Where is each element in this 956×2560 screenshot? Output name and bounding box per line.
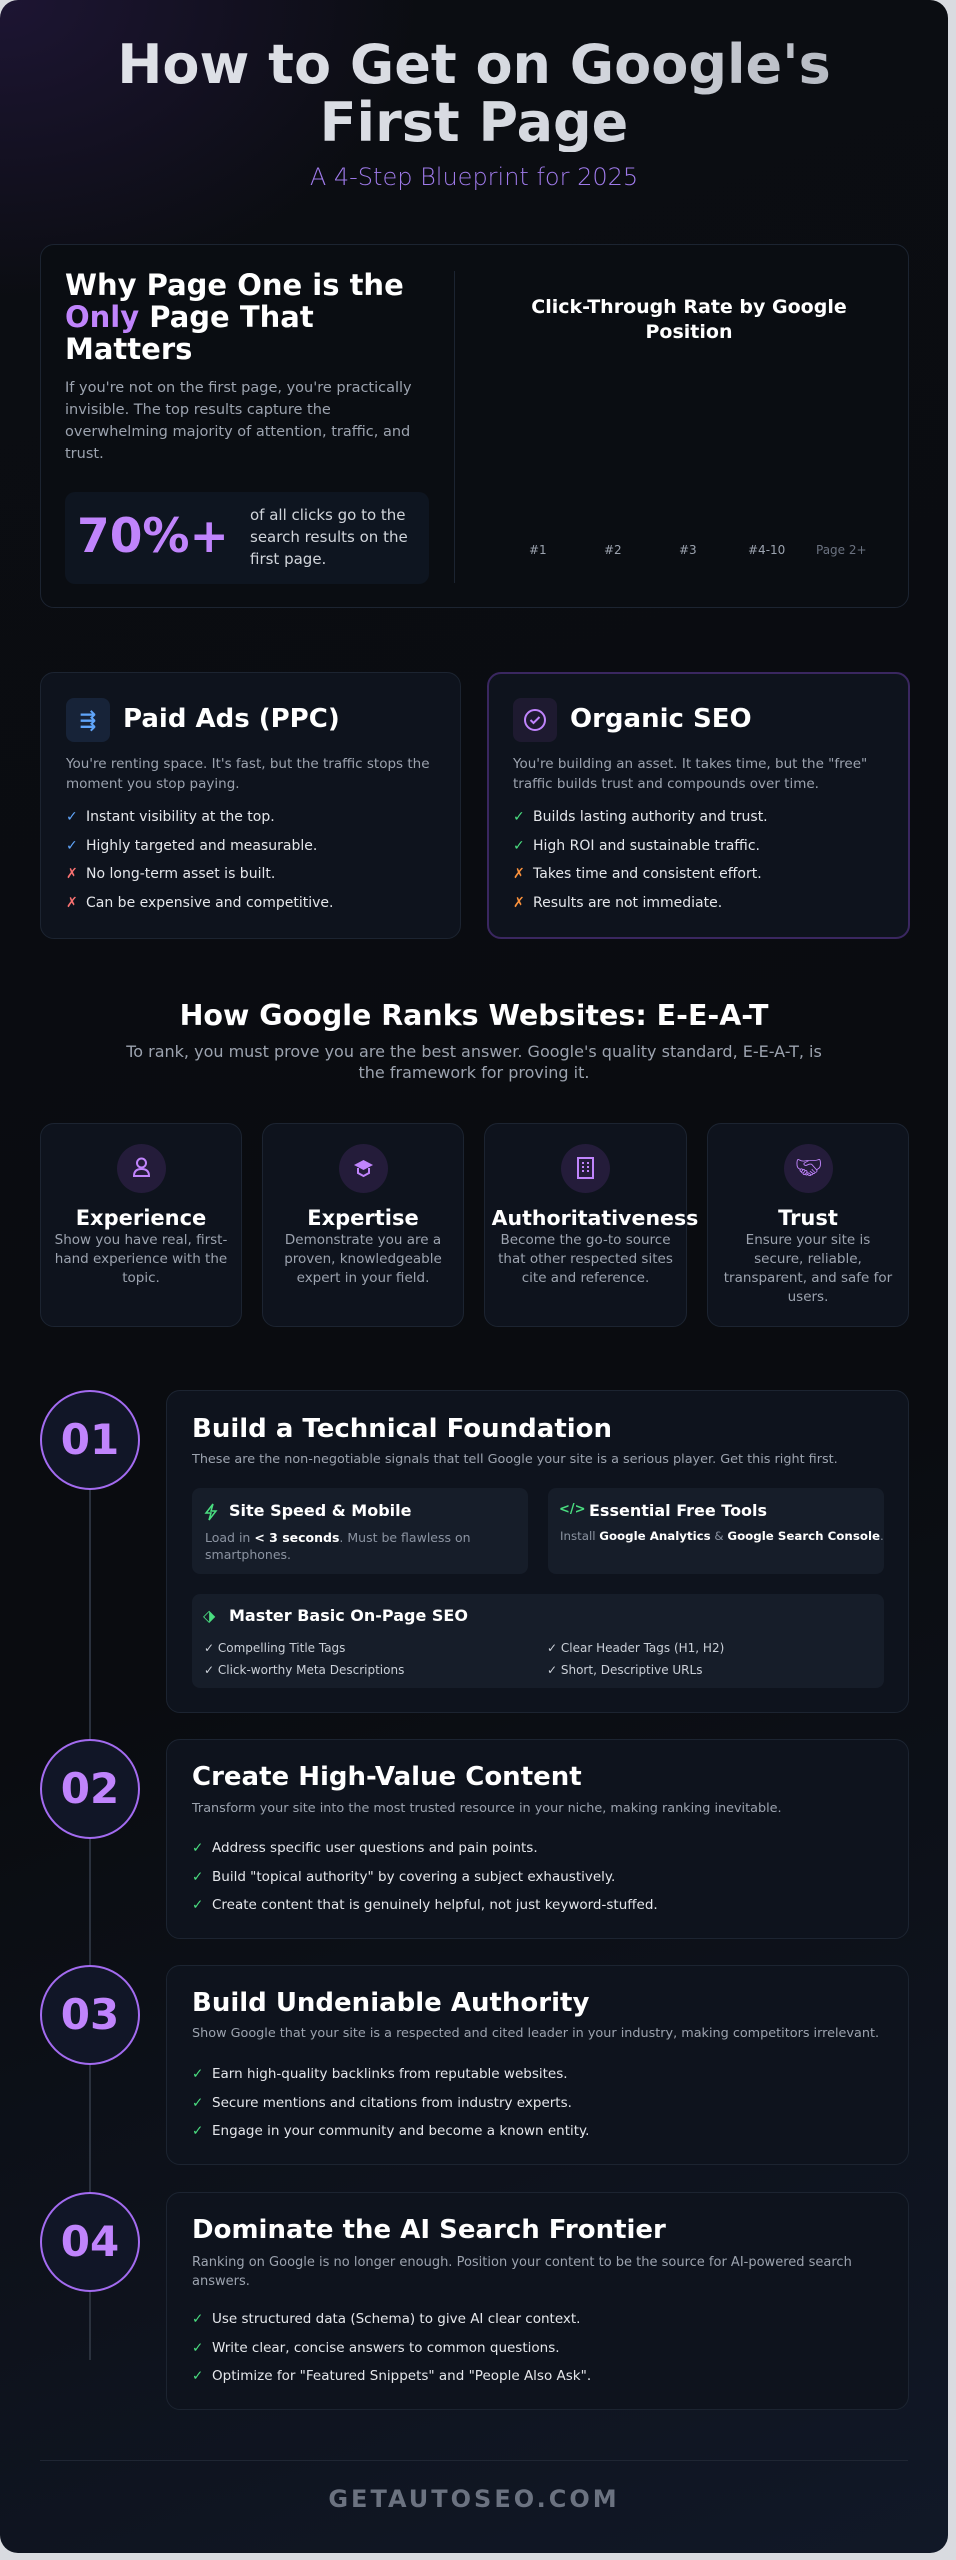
box: site speed: Site Speed & Mobile — [229, 1501, 412, 1520]
box: on-page seo: ✓ Clear Header Tags (H1, H2) — [547, 1641, 724, 1655]
list: step 2: Address specific user questions and pain points. — [212, 1840, 538, 1856]
text: E-E-A-T intro: the framework for proving it. — [359, 1063, 589, 1082]
list: step 4: Write clear, concise answers to common questions. — [212, 2340, 560, 2356]
heading: paid ads: Paid Ads (PPC) — [123, 704, 340, 734]
text: authoritativeness: that other respected sites — [498, 1251, 673, 1267]
stat number: 70%+ — [77, 509, 229, 564]
box: site speed: smartphones. — [205, 1547, 291, 1562]
text: step 4 description — [192, 2255, 852, 2289]
title — [0, 36, 948, 152]
text: expertise: Demonstrate you are a — [285, 1232, 441, 1248]
list: step 3: ✓ — [192, 2094, 203, 2110]
list: organic pros/cons: ✗ — [513, 894, 525, 910]
list: organic pros/cons: Results are not immediate. — [533, 894, 722, 910]
list: step 4: ✓ — [192, 2311, 203, 2327]
text: step 1 description: These are the non-negotiable signals that tell Google your site is a serious player. Get this right first. — [192, 1452, 838, 1467]
list: paid ads pros/cons: ✗ — [66, 894, 78, 910]
box: on-page seo — [192, 1594, 884, 1688]
step 01 badge — [40, 1390, 140, 1490]
list: paid ads pros/cons: Highly targeted and measurable. — [86, 838, 317, 854]
text: trust — [724, 1232, 892, 1305]
text: trust: transparent, and safe for — [724, 1270, 892, 1286]
heading: why page one — [65, 268, 404, 366]
heading: E-E-A-T: How Google Ranks Websites: E-E-A-T — [180, 999, 768, 1032]
list: step 4: Use structured data (Schema) to give AI clear context. — [212, 2311, 580, 2327]
text: intro paragraph: trust. — [65, 446, 104, 462]
box: free tools: Essential Free Tools — [589, 1501, 767, 1520]
panel: step 4 AI search — [166, 2192, 909, 2410]
box: on-page seo: ✓ Click-worthy Meta Descriptions — [204, 1663, 404, 1677]
text: paid ads description — [66, 756, 430, 792]
text: authoritativeness: Become the go-to source — [500, 1232, 671, 1248]
box: free tools — [548, 1488, 884, 1574]
text: authoritativeness: cite and reference. — [522, 1270, 649, 1286]
list: step 3: Engage in your community and become a known entity. — [212, 2123, 589, 2139]
box: site speed: Load in < 3 seconds. Must be flawless on — [205, 1530, 471, 1545]
chart axis labels — [529, 543, 867, 557]
chart axis labels: #1 — [529, 543, 547, 557]
list: step 2: ✓ — [192, 1840, 203, 1856]
text: paid ads description: You're renting space. It's fast, but the traffic stops the — [66, 756, 430, 772]
panel: step 2 content — [166, 1739, 909, 1939]
icon: graduation cap — [339, 1144, 388, 1193]
card: experience — [40, 1123, 242, 1327]
icon: handshake: 🤝︎ — [795, 1156, 822, 1181]
text: experience: Show you have real, first- — [55, 1232, 227, 1248]
subtitle: A 4-Step Blueprint for 2025 — [310, 163, 638, 191]
text: E-E-A-T intro — [126, 1042, 822, 1082]
text: intro paragraph: invisible. The top results capture the — [65, 402, 331, 418]
icon: code: </> — [559, 1502, 586, 1517]
list: organic pros/cons: ✗ — [513, 866, 525, 882]
icon: person — [117, 1144, 166, 1193]
box: on-page seo: ✓ Compelling Title Tags — [204, 1641, 345, 1655]
footer: brand: GETAUTOSEO.COM — [328, 2485, 620, 2513]
text: intro paragraph — [65, 380, 412, 462]
chart title — [531, 296, 847, 343]
text: expertise — [284, 1232, 442, 1286]
step 02 badge — [40, 1739, 140, 1839]
step 01 badge: 01 — [61, 1415, 119, 1464]
list: paid ads pros/cons: ✓ — [66, 838, 78, 854]
panel: step 1 technical foundation — [166, 1390, 909, 1713]
title: First Page — [320, 91, 628, 154]
list: paid ads pros/cons: No long-term asset is built. — [86, 866, 275, 882]
stat box: 70%+ — [65, 492, 429, 584]
box: on-page seo: ✓ Short, Descriptive URLs — [547, 1663, 702, 1677]
icon: bolt — [204, 1504, 218, 1520]
text: trust: Ensure your site is — [746, 1232, 870, 1248]
list: step 4: Optimize for "Featured Snippets" and "People Also Ask". — [212, 2368, 591, 2384]
stat text: first page. — [250, 550, 326, 568]
stat text: of all clicks go to the — [250, 506, 406, 524]
panel: why page one — [40, 244, 909, 608]
card: expertise — [262, 1123, 464, 1327]
text: trust: users. — [788, 1289, 828, 1305]
list: step 3: ✓ — [192, 2066, 203, 2082]
list: step 3: ✓ — [192, 2123, 203, 2139]
chart: CTR by position — [529, 296, 867, 557]
panel: organic seo — [487, 672, 910, 939]
text: expertise: proven, knowledgeable — [284, 1251, 442, 1267]
text: step 4 description: answers. — [192, 2274, 250, 2289]
box: site speed — [192, 1488, 528, 1574]
heading: step 2: Create High-Value Content — [192, 1762, 582, 1792]
box: on-page seo: Master Basic On-Page SEO — [229, 1606, 468, 1625]
card: authoritativeness — [484, 1123, 687, 1327]
icon: paid ads: ⇶ — [80, 708, 96, 732]
list: step 4 — [192, 2311, 591, 2384]
chart axis labels: Page 2+ — [816, 543, 867, 557]
text: trust: secure, reliable, — [754, 1251, 862, 1267]
step 03 badge — [40, 1965, 140, 2065]
card: trust — [707, 1123, 909, 1327]
icon: paid ads — [66, 698, 110, 742]
text: organic description: You're building an asset. It takes time, but the "free" — [513, 756, 867, 772]
panel: step 3 authority — [166, 1965, 909, 2165]
chart title: Click-Through Rate by Google — [531, 296, 847, 318]
text: expertise: expert in your field. — [297, 1270, 429, 1286]
text: authoritativeness — [498, 1232, 673, 1286]
heading: why page one: Why Page One is the — [65, 268, 404, 302]
list: organic pros/cons: High ROI and sustainable traffic. — [533, 838, 760, 854]
icon: tag: ⬗ — [203, 1606, 215, 1625]
text: experience: hand experience with the — [55, 1251, 227, 1267]
title: experience: Experience — [76, 1206, 206, 1230]
list: paid ads pros/cons — [66, 809, 333, 910]
step 04 badge — [40, 2192, 140, 2292]
text: experience: topic. — [122, 1270, 160, 1286]
stat text — [250, 506, 408, 568]
box: free tools: Install Google Analytics & Google Search Console. — [560, 1529, 884, 1543]
heading: why page one: Matters — [65, 332, 192, 366]
text: organic description — [513, 756, 867, 792]
panel: paid ads — [40, 672, 461, 939]
heading: step 3: Build Undeniable Authority — [192, 1988, 589, 2018]
list: step 2: Build "topical authority" by covering a subject exhaustively. — [212, 1868, 615, 1884]
step 03 badge: 03 — [61, 1990, 119, 2039]
text: step 2 description: Transform your site into the most trusted resource in your niche, making ranking inevitable. — [192, 1801, 782, 1816]
title: expertise: Expertise — [307, 1206, 419, 1230]
text: experience — [55, 1232, 227, 1286]
title: authoritativeness: Authoritativeness — [492, 1206, 698, 1230]
chart axis labels: #4-10 — [748, 543, 785, 557]
list: step 4: ✓ — [192, 2368, 203, 2384]
icon: organic seo — [513, 698, 557, 742]
list: step 2 — [192, 1840, 658, 1913]
text: step 3 description: Show Google that your site is a respected and cited leader in your industry, making competitors irrelevant. — [192, 2026, 879, 2041]
text: paid ads description: moment you stop paying. — [66, 776, 240, 792]
list: step 3 — [192, 2066, 589, 2139]
list: organic pros/cons: Builds lasting authority and trust. — [533, 809, 768, 825]
title: trust: Trust — [778, 1206, 838, 1230]
heading: organic seo: Organic SEO — [570, 704, 752, 734]
list: organic pros/cons: ✓ — [513, 809, 525, 825]
list: step 2: ✓ — [192, 1897, 203, 1913]
text: E-E-A-T intro: To rank, you must prove you are the best answer. Google's quality standard, E-E-A-T, is — [126, 1042, 822, 1061]
chart axis labels: #3 — [679, 543, 697, 557]
list: paid ads pros/cons: Instant visibility at the top. — [86, 809, 275, 825]
text: organic description: traffic builds trust and compounds over time. — [513, 776, 819, 792]
icon: handshake — [784, 1144, 833, 1193]
step 02 badge: 02 — [61, 1764, 119, 1813]
list: step 4: ✓ — [192, 2340, 203, 2356]
text: intro paragraph: If you're not on the first page, you're practically — [65, 380, 412, 396]
list: organic pros/cons — [513, 809, 768, 910]
heading: step 4: Dominate the AI Search Frontier — [192, 2215, 666, 2245]
step 04 badge: 04 — [61, 2217, 119, 2266]
text: intro paragraph: overwhelming majority of attention, traffic, and — [65, 424, 410, 440]
list: step 2: Create content that is genuinely helpful, not just keyword-stuffed. — [212, 1897, 658, 1913]
chart axis labels: #2 — [604, 543, 622, 557]
list: paid ads pros/cons: ✓ — [66, 809, 78, 825]
list: organic pros/cons: ✓ — [513, 838, 525, 854]
stat text: search results on the — [250, 528, 408, 546]
list: step 2: ✓ — [192, 1868, 203, 1884]
list: paid ads pros/cons: Can be expensive and competitive. — [86, 894, 333, 910]
list: paid ads pros/cons: ✗ — [66, 866, 78, 882]
title: How to Get on Google's — [117, 33, 831, 96]
heading: step 1: Build a Technical Foundation — [192, 1414, 612, 1444]
list: step 3: Secure mentions and citations from industry experts. — [212, 2094, 572, 2110]
icon: building — [561, 1144, 610, 1193]
chart title: Position — [646, 321, 732, 343]
heading: why page one: Only Page That — [65, 300, 314, 334]
list: organic pros/cons: Takes time and consistent effort. — [533, 866, 762, 882]
text: step 4 description: Ranking on Google is no longer enough. Position your content to be the source for AI-powered search — [192, 2255, 852, 2270]
list: step 3: Earn high-quality backlinks from reputable websites. — [212, 2066, 568, 2082]
